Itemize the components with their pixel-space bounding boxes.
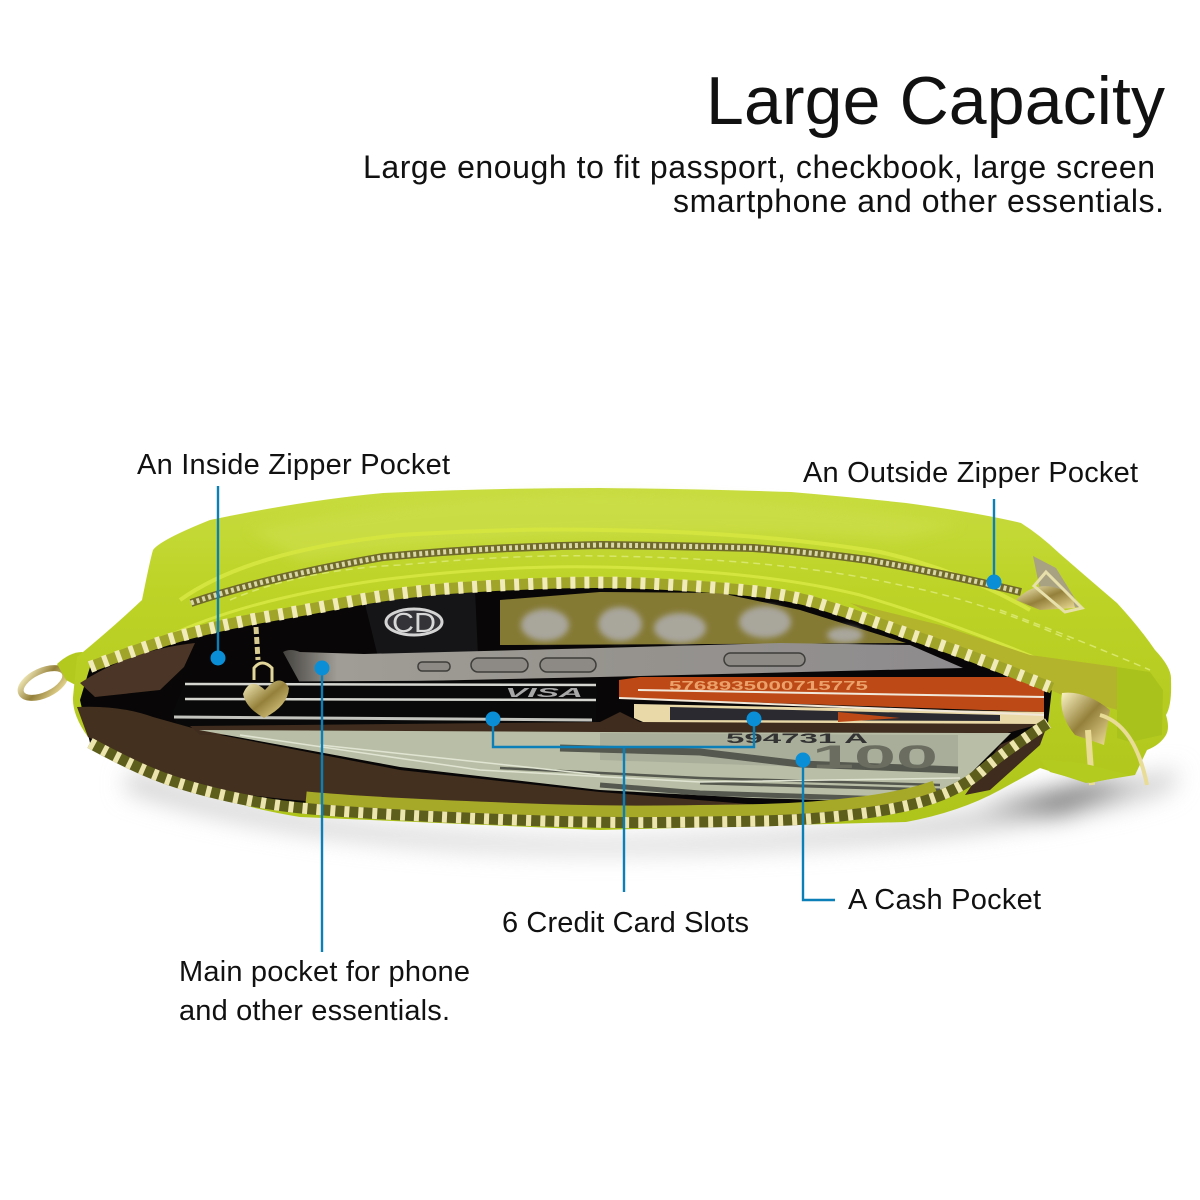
phone edge <box>283 643 963 683</box>
outside zipper band <box>160 530 1150 670</box>
left credit cards <box>172 680 597 730</box>
label: outside zipper pocket: An Outside Zipper Pocket <box>803 457 1138 489</box>
lower lining <box>77 707 760 815</box>
label: main pocket <box>179 956 470 1027</box>
outside zipper puller <box>1016 556 1082 612</box>
upper zipper <box>90 582 1118 710</box>
subtitle: smartphone and other essentials. <box>673 183 1164 219</box>
cash <box>199 730 1011 803</box>
subtitle <box>363 149 1164 219</box>
bag body <box>73 488 1171 830</box>
callout dots <box>210 574 1002 768</box>
right credit cards <box>619 677 1044 725</box>
glitter pouch <box>500 592 906 645</box>
heart charm <box>243 627 289 718</box>
ground shadow <box>125 770 1180 852</box>
inner corner lining <box>965 723 1048 795</box>
top highlight <box>250 495 960 560</box>
label: main pocket: and other essentials. <box>179 995 450 1027</box>
cash: 594731 A <box>726 730 868 746</box>
card case with logo: CD <box>392 607 436 638</box>
right end cap <box>1117 667 1163 742</box>
right credit cards: 5768935000715775 <box>669 678 868 693</box>
subtitle: Large enough to fit passport, checkbook, large screen <box>363 149 1155 185</box>
lower zipper <box>90 723 1048 823</box>
left credit cards: VISA <box>505 685 583 700</box>
right zipper puller <box>1040 693 1147 785</box>
cash: 100 <box>812 739 938 775</box>
label: main pocket: Main pocket for phone <box>179 956 470 988</box>
label: inside zipper pocket: An Inside Zipper Pocket <box>137 449 450 481</box>
left side ring <box>16 652 98 704</box>
bag interior <box>80 582 1052 823</box>
card case with logo <box>364 590 478 657</box>
label: cash pocket: A Cash Pocket <box>848 884 1041 916</box>
bag photo illustration <box>16 488 1180 852</box>
inside upper lining <box>80 643 195 697</box>
card pocket strip <box>190 712 1040 735</box>
title: Large Capacity <box>706 63 1165 139</box>
label: credit card slots: 6 Credit Card Slots <box>502 907 749 939</box>
callout lines <box>218 486 994 952</box>
